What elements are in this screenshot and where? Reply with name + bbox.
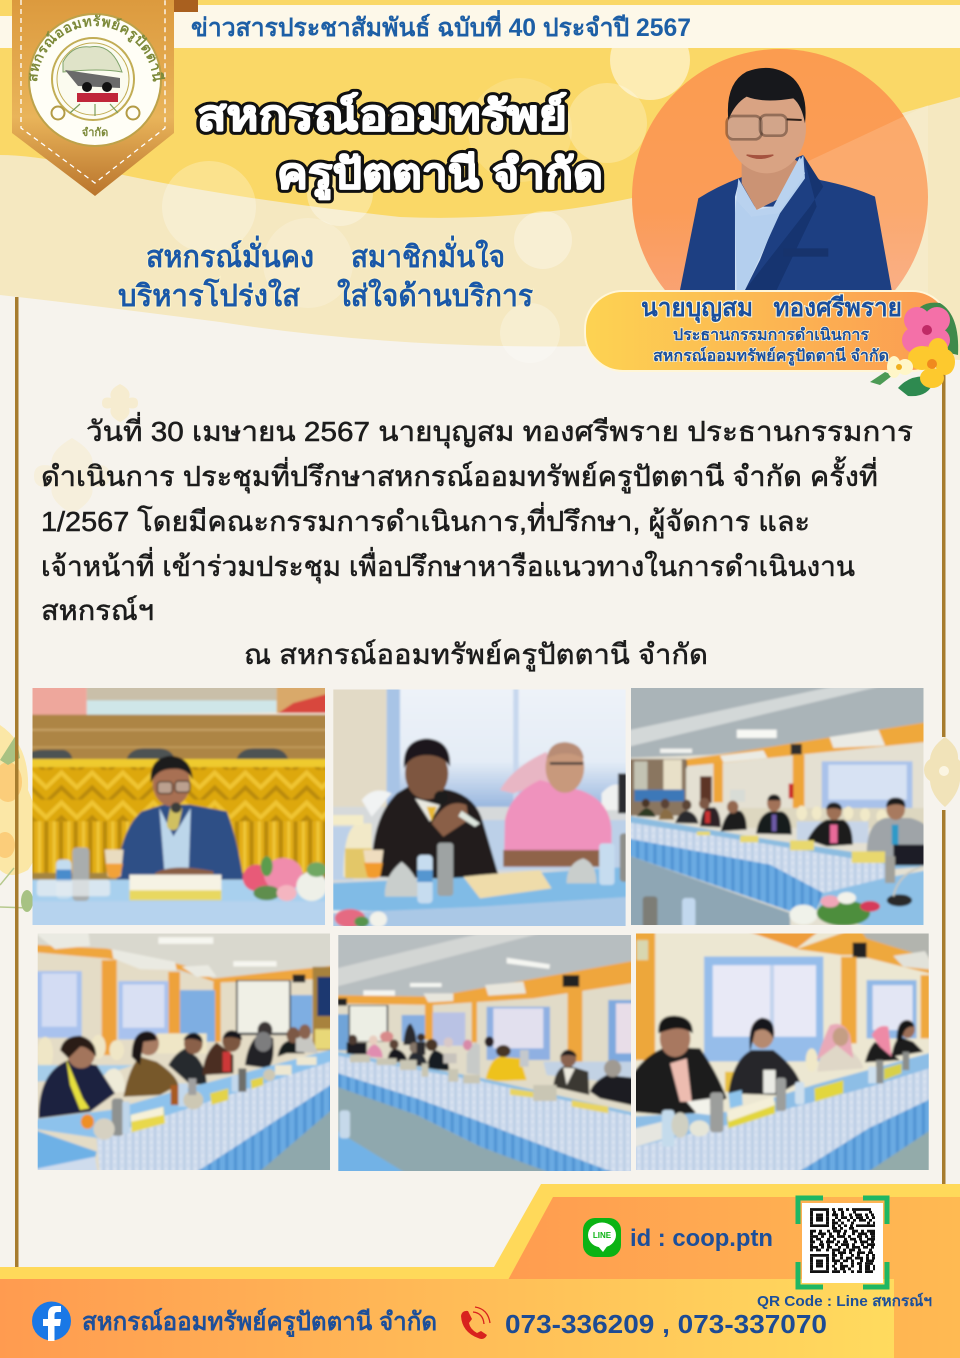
title: สหกรณ์ออมทรัพย์ xyxy=(197,92,567,139)
slogan xyxy=(118,235,533,313)
body text: สหกรณ์ฯ xyxy=(41,595,154,626)
title: สหกรณ์ออมทรัพย์ xyxy=(197,92,567,139)
slogan: สหกรณ์มั่นคง xyxy=(146,235,314,274)
phone numbers: 073-336209 , 073-337070 xyxy=(505,1309,827,1339)
president portrait xyxy=(632,49,928,293)
ribbon banner xyxy=(12,0,198,196)
header background bands xyxy=(0,0,960,363)
line id: id : coop.ptn xyxy=(630,1225,773,1252)
newsletter strip xyxy=(0,5,960,48)
president organisation: สหกรณ์ออมทรัพย์ครูปัตตานี จำกัด xyxy=(653,346,889,367)
body text: วันที่ 30 เมษายน 2567 นายบุญสม ทองศรีพราย ประธานกรรมการ xyxy=(86,412,913,449)
body text: เจ้าหน้าที่ เข้าร่วมประชุม เพื่อปรึกษาหารือแนวทางในการดำเนินงาน xyxy=(41,547,855,584)
logo limited text: จำกัด xyxy=(82,126,108,139)
slogan: สมาชิกมั่นใจ xyxy=(351,235,505,274)
body text: ดำเนินการ ประชุมที่ปรึกษาสหกรณ์ออมทรัพย์ครูปัตตานี จำกัด ครั้งที่ xyxy=(41,456,878,494)
newsletter heading: ข่าวสารประชาสัมพันธ์ ฉบับที่ 40 ประจำปี 2567 xyxy=(191,10,691,42)
slogan: ใส่ใจด้านบริการ xyxy=(337,278,533,313)
line word: LINE xyxy=(593,1231,612,1240)
tropical flowers xyxy=(870,303,958,396)
decoration: right ornament xyxy=(924,737,960,807)
photo 1: chairman speaking xyxy=(32,688,325,925)
president role: ประธานกรรมการดำเนินการ xyxy=(673,326,869,344)
body text: 1/2567 โดยมีคณะกรรมการดำเนินการ,ที่ปรึกษา, ผู้จัดการ และ xyxy=(41,502,810,539)
cooperative logo xyxy=(28,13,165,147)
photo 6: right row of attendees xyxy=(636,934,929,1170)
body text: ณ สหกรณ์ออมทรัพย์ครูปัตตานี จำกัด xyxy=(244,639,708,672)
qr caption: QR Code : Line สหกรณ์ฯ xyxy=(757,1292,932,1310)
gold frame lines xyxy=(15,297,946,1268)
icon: phone xyxy=(461,1307,490,1339)
photo 4: left row of attendees xyxy=(38,934,330,1170)
photo 3: meeting room long table xyxy=(631,688,924,925)
photo 2: two committee members xyxy=(333,690,626,926)
slogan: บริหารโปร่งใส xyxy=(118,277,301,313)
facebook name: สหกรณ์ออมทรัพย์ครูปัตตานี จำกัด xyxy=(82,1307,437,1338)
ornament: faint background motifs xyxy=(34,384,138,514)
photo 5: wide view of meeting room xyxy=(338,935,631,1171)
decoration: left flowers xyxy=(0,725,39,912)
logo ring text: สหกรณ์ออมทรัพย์ครูปัตตานี xyxy=(29,14,165,82)
icon: facebook xyxy=(32,1302,71,1341)
title: ครูปัตตานี จำกัด xyxy=(277,150,603,200)
title: ครูปัตตานี จำกัด xyxy=(277,150,603,200)
president name: นายบุญสม ทองศรีพราย xyxy=(641,294,902,324)
body text xyxy=(41,412,913,672)
qr code xyxy=(798,1198,887,1287)
name pill xyxy=(585,291,950,371)
title xyxy=(197,92,603,200)
icon: line xyxy=(583,1218,621,1257)
footer band xyxy=(0,1184,960,1358)
